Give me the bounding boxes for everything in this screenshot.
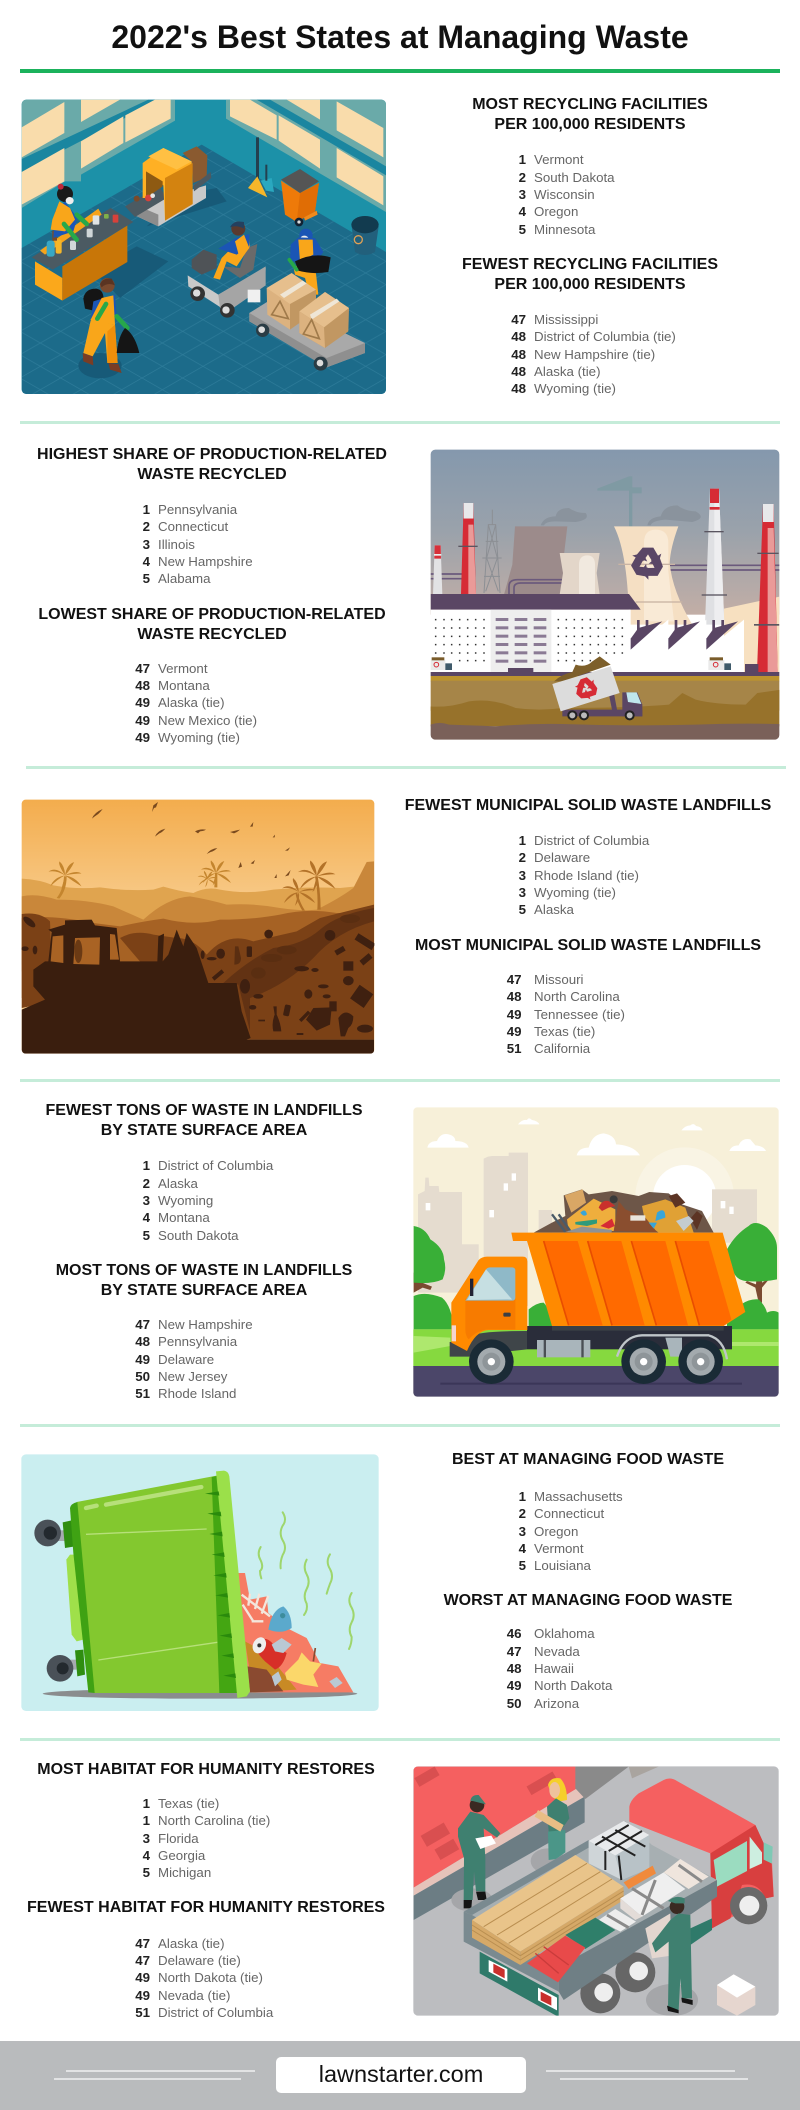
list: top 5 (519, 833, 650, 917)
list: top 5: 4 (143, 1210, 150, 1225)
list: bottom 5: 49 (135, 1970, 150, 1985)
panel: production-related waste: Alabama (158, 571, 210, 586)
list: top 5: 1 (519, 833, 526, 848)
panel: municipal landfills: North Carolina (534, 989, 620, 1004)
beige building (724, 596, 781, 672)
list: top 5: 2 (143, 519, 150, 534)
dump truck (552, 656, 642, 720)
list: bottom 5: 49 (507, 1024, 522, 1039)
panel: food waste: Vermont (534, 1541, 584, 1556)
panel: municipal landfills: Rhode Island (tie) (534, 868, 639, 883)
panel: food waste: Connecticut (534, 1506, 604, 1521)
small trucks (430, 657, 731, 670)
truck wheels (469, 1339, 723, 1384)
white boxes (599, 1859, 709, 1932)
panel: habitat for humanity restores: Michigan (158, 1865, 211, 1880)
forklift driver (188, 222, 266, 318)
panel: habitat for humanity restores: Florida (158, 1831, 199, 1846)
list: bottom 5: 48 (511, 364, 526, 379)
list: bottom 5: 49 (135, 730, 150, 745)
list: top 5 (142, 1158, 274, 1243)
list: bottom 5: 51 (135, 1386, 150, 1401)
heading: most landfills: MOST MUNICIPAL SOLID WASTE LANDFILLS (415, 937, 761, 954)
heading: highest share (37, 446, 387, 483)
panel: tons of waste by surface area: Montana (158, 1210, 210, 1225)
illustration: factory and dump truck (430, 450, 780, 740)
panel: recycling facilities: Minnesota (534, 222, 595, 237)
panel: tons of waste by surface area: District of Columbia (158, 1158, 273, 1173)
foreground palms (282, 860, 335, 911)
bin wheels (34, 1520, 85, 1682)
panel: recycling facilities: Mississippi (534, 312, 598, 327)
list: top 5: 5 (143, 1228, 150, 1243)
list: top 5: 1 (143, 1813, 150, 1828)
heading: most tons: BY STATE SURFACE AREA (101, 1282, 307, 1299)
garbage pile (534, 1189, 714, 1233)
list: top 5: 2 (143, 1176, 150, 1191)
panel: food waste: Oklahoma (534, 1626, 595, 1641)
illustration: tipped green bin (21, 1454, 379, 1711)
heading: highest share: WASTE RECYCLED (137, 466, 287, 483)
list: bottom 5: 46 (507, 1626, 522, 1641)
green and red pipes (527, 1918, 615, 1982)
heading: most tons: MOST TONS OF WASTE IN LANDFILLS (56, 1262, 352, 1279)
panel: recycling facilities (22, 96, 718, 396)
loose cardboard box (717, 1974, 755, 2016)
blue recycling bin (351, 216, 379, 255)
list: bottom 5: 49 (507, 1678, 522, 1693)
list: top 5: 5 (143, 1865, 150, 1880)
bin highlights (86, 1487, 217, 1660)
person shadows (451, 1848, 698, 2016)
truck cab (451, 1257, 527, 1351)
trash mound dark front (223, 908, 374, 1031)
far hills (22, 878, 354, 920)
heading: best food waste: BEST AT MANAGING FOOD WASTE (452, 1451, 724, 1468)
list: top 5: 3 (143, 537, 150, 552)
big cooling tower with recycling symbol (614, 526, 692, 625)
heading: fewest recycling facilities (462, 256, 718, 293)
panel: tons of waste by surface area: South Dakota (158, 1228, 239, 1243)
list: bottom 5: 47 (135, 1953, 150, 1968)
panel: tons of waste by surface area: Alaska (158, 1176, 198, 1191)
panel: habitat for humanity restores: Alaska (tie) (158, 1936, 225, 1951)
heading: most recycling facilities: PER 100,000 RESIDENTS (494, 116, 686, 133)
list: bottom 5: 48 (507, 1661, 522, 1676)
list: bottom 5: 51 (507, 1041, 522, 1056)
right windows (226, 100, 386, 212)
list: top 5: 1 (143, 1796, 150, 1811)
list: bottom 5: 49 (135, 695, 150, 710)
panel: production-related waste: Wyoming (tie) (158, 730, 240, 745)
heading: fewest landfills: FEWEST MUNICIPAL SOLID WASTE LANDFILLS (405, 797, 771, 814)
list: bottom 5: 47 (135, 1936, 150, 1951)
truck cab (629, 1779, 774, 1928)
heading: highest share: HIGHEST SHARE OF PRODUCTION-RELATED (37, 446, 387, 463)
left windows (22, 100, 175, 208)
heading: fewest restores: FEWEST HABITAT FOR HUMANITY RESTORES (27, 1899, 385, 1916)
list: top 5: 2 (519, 850, 526, 865)
list: top 5: 1 (519, 1489, 526, 1504)
heading: most recycling facilities (472, 96, 708, 133)
panel: habitat for humanity restores (27, 1761, 779, 2020)
list: bottom 5: 48 (511, 381, 526, 396)
list: top 5: 4 (143, 1848, 150, 1863)
panel: tons of waste by surface area: New Jersey (158, 1369, 227, 1384)
panel: habitat for humanity restores: Texas (tie) (158, 1796, 219, 1811)
list: top 5: 3 (519, 885, 526, 900)
panel: food waste: Hawaii (534, 1661, 574, 1676)
pipes (431, 565, 781, 594)
panel: tons of waste by surface area: New Hampshire (158, 1317, 253, 1332)
list: top 5: 3 (519, 1524, 526, 1539)
heading: most tons (56, 1262, 352, 1299)
list: top 5: 5 (143, 571, 150, 586)
illustration: recycling plant workers (22, 100, 386, 394)
background crane and smoke (541, 476, 701, 526)
panel: recycling facilities: Alaska (tie) (534, 364, 601, 379)
heading: most restores: MOST HABITAT FOR HUMANITY RESTORES (37, 1761, 375, 1778)
panel: food waste: North Dakota (534, 1678, 612, 1693)
grass (412, 1329, 780, 1367)
list: bottom 5: 48 (507, 989, 522, 1004)
ground layers (429, 672, 781, 742)
heading: lowest share: WASTE RECYCLED (137, 626, 287, 643)
panel: food waste: Oregon (534, 1524, 578, 1539)
panel: recycling facilities: Oregon (534, 204, 578, 219)
panel: production-related waste: Connecticut (158, 519, 228, 534)
list: top 5: 5 (519, 222, 526, 237)
man with clipboard (458, 1795, 500, 1908)
sorting machine (125, 146, 211, 226)
panel: tons of waste by surface area: Wyoming (158, 1193, 213, 1208)
list: bottom 5 (506, 1626, 612, 1711)
bulldozer cab windows (51, 934, 119, 965)
heading: worst food waste: WORST AT MANAGING FOOD WASTE (444, 1592, 732, 1609)
panel: production-related waste: Alaska (tie) (158, 695, 225, 710)
footer logo box (276, 2057, 526, 2093)
broom and dustpan (248, 137, 274, 197)
man with box (645, 1897, 693, 2013)
trash mound left (22, 913, 53, 1008)
panel: tons of waste by surface area (45, 1102, 779, 1401)
bin body (77, 1476, 237, 1693)
floor (20, 141, 388, 396)
sun (635, 1147, 734, 1246)
bulldozer silhouette (22, 920, 374, 1054)
food waste pile (238, 1573, 353, 1692)
list: top 5: 3 (519, 868, 526, 883)
panel: food waste (21, 1451, 732, 1711)
truck bed (464, 1821, 717, 2000)
panel: tons of waste by surface area: Delaware (158, 1352, 214, 1367)
panel: food waste: Massachusetts (534, 1489, 623, 1504)
panel: recycling facilities: Wisconsin (534, 187, 595, 202)
shadow (43, 1689, 357, 1699)
list: top 5 (518, 1489, 623, 1573)
list: top 5: 2 (519, 1506, 526, 1521)
palms (48, 860, 231, 899)
list: bottom 5: 47 (135, 661, 150, 676)
road (412, 1366, 780, 1398)
list: top 5 (142, 502, 253, 586)
list: top 5: 4 (143, 554, 150, 569)
heading: fewest tons: FEWEST TONS OF WASTE IN LANDFILLS (45, 1102, 363, 1119)
list: bottom 5: 51 (135, 2005, 150, 2020)
list: bottom 5: 47 (507, 972, 522, 987)
list: top 5: 1 (143, 1158, 150, 1173)
panel: municipal landfills: Tennessee (tie) (534, 1007, 625, 1022)
panel: production-related waste: Montana (158, 678, 210, 693)
list: top 5: 1 (143, 502, 150, 517)
list: bottom 5: 47 (135, 1317, 150, 1332)
footer (0, 2041, 800, 2110)
worker with black bag (289, 229, 331, 295)
list: bottom 5: 47 (511, 312, 526, 327)
panel: municipal landfills (22, 797, 771, 1056)
panel: production-related waste: New Hampshire (158, 554, 253, 569)
heading: lowest share: LOWEST SHARE OF PRODUCTION-RELATED (38, 606, 386, 623)
heading: fewest recycling facilities: FEWEST RECYCLING FACILITIES (462, 256, 718, 273)
list: top 5: 3 (143, 1193, 150, 1208)
list: top 5 (518, 152, 615, 237)
panel: production-related waste: New Mexico (tie) (158, 713, 257, 728)
birds (92, 802, 291, 878)
panel: production-related waste: Vermont (158, 661, 208, 676)
list: top 5: 5 (519, 1558, 526, 1573)
panel: municipal landfills: District of Columbia (534, 833, 649, 848)
cart with cardboard boxes (249, 273, 365, 371)
orange wheelie bin (281, 169, 319, 226)
heading: most recycling facilities: MOST RECYCLING FACILITIES (472, 96, 708, 113)
near hills (22, 911, 374, 998)
small cooling tower (560, 553, 600, 595)
dark cooling tower (504, 526, 568, 594)
list: top 5: 3 (143, 1831, 150, 1846)
illustration: truck loaded with building materials (413, 1766, 779, 2016)
panel: recycling facilities: Wyoming (tie) (534, 381, 616, 396)
list: bottom 5 (135, 1317, 253, 1401)
heading: fewest recycling facilities: PER 100,000 RESIDENTS (494, 276, 686, 293)
panel: municipal landfills: Wyoming (tie) (534, 885, 616, 900)
panel: production-related waste: Illinois (158, 537, 195, 552)
list: top 5 (142, 1796, 270, 1880)
list: top 5: 5 (519, 902, 526, 917)
worker carrying bags (78, 278, 139, 378)
panel: production-related waste (37, 446, 780, 745)
list: bottom 5: 48 (511, 347, 526, 362)
list: bottom 5: 50 (135, 1369, 150, 1384)
bin edge stripes (70, 1471, 250, 1698)
illustration: orange dump truck (413, 1107, 779, 1397)
heading: lowest share (38, 606, 386, 643)
list: top 5: 3 (519, 187, 526, 202)
heading: fewest tons (45, 1102, 363, 1139)
panel: habitat for humanity restores: North Dakota (tie) (158, 1970, 263, 1985)
list: bottom 5 (135, 1936, 274, 2020)
list: bottom 5: 49 (135, 713, 150, 728)
list: bottom 5: 49 (507, 1007, 522, 1022)
title: 2022's Best States at Managing Waste (111, 19, 689, 55)
list: top 5: 1 (519, 152, 526, 167)
chimneys (433, 489, 779, 672)
footer logo box: lawnstarter.com (319, 2061, 483, 2087)
list: bottom 5 (135, 661, 257, 745)
truck chassis (450, 1326, 732, 1359)
panel: municipal landfills: Texas (tie) (534, 1024, 595, 1039)
list: top 5: 4 (519, 1541, 526, 1556)
list: bottom 5: 49 (135, 1352, 150, 1367)
lumber stack (472, 1855, 624, 1965)
panel: habitat for humanity restores: North Carolina (tie) (158, 1813, 270, 1828)
stacked boards (589, 1821, 656, 1889)
lattice tower (482, 510, 502, 593)
mid hills (22, 861, 374, 971)
factory building (431, 594, 758, 673)
illustration: landfill at sunset (22, 800, 374, 1054)
truck dump body (511, 1233, 745, 1326)
panel: habitat for humanity restores: Nevada (tie) (158, 1988, 230, 2003)
list: bottom 5 (506, 972, 625, 1056)
bin lid hinge side (66, 1555, 83, 1641)
panel: recycling facilities: New Hampshire (tie) (534, 347, 655, 362)
sorting conveyor table (32, 208, 133, 301)
list: bottom 5: 48 (135, 1334, 150, 1349)
panel: recycling facilities: South Dakota (534, 170, 615, 185)
worker at conveyor (51, 184, 87, 240)
heading: fewest tons: BY STATE SURFACE AREA (101, 1122, 307, 1139)
panel: habitat for humanity restores: Georgia (158, 1848, 205, 1863)
city buildings (418, 1153, 757, 1311)
trash mound mid (120, 905, 374, 1040)
list: bottom 5: 50 (507, 1696, 522, 1711)
list: bottom 5: 48 (135, 678, 150, 693)
panel: municipal landfills: Alaska (534, 902, 574, 917)
panel: tons of waste by surface area: Rhode Island (158, 1386, 236, 1401)
trees (414, 1223, 779, 1329)
panel: municipal landfills: Delaware (534, 850, 590, 865)
panel: municipal landfills: California (534, 1041, 590, 1056)
list: top 5: 2 (519, 170, 526, 185)
panel: recycling facilities: District of Columbia (tie) (534, 329, 676, 344)
truck chassis (480, 1918, 712, 2017)
panel: habitat for humanity restores: Delaware (tie) (158, 1953, 241, 1968)
woman with logs (535, 1778, 569, 1860)
panel: production-related waste: Pennsylvania (158, 502, 237, 517)
panel: food waste: Louisiana (534, 1558, 591, 1573)
panel: tons of waste by surface area: Pennsylvania (158, 1334, 237, 1349)
list: bottom 5: 48 (511, 329, 526, 344)
clouds (427, 1118, 766, 1155)
panel: food waste: Arizona (534, 1696, 579, 1711)
store wall (414, 1767, 659, 1920)
trash silhouettes (21, 914, 375, 1036)
panel: food waste: Nevada (534, 1644, 580, 1659)
list: bottom 5: 49 (135, 1988, 150, 2003)
odor lines (259, 1512, 354, 1649)
panel: recycling facilities: Vermont (534, 152, 584, 167)
list: top 5: 4 (519, 204, 526, 219)
list: bottom 5: 47 (507, 1644, 522, 1659)
panel: habitat for humanity restores: District of Columbia (158, 2005, 273, 2020)
panel: municipal landfills: Missouri (534, 972, 584, 987)
list: bottom 5 (511, 312, 676, 396)
